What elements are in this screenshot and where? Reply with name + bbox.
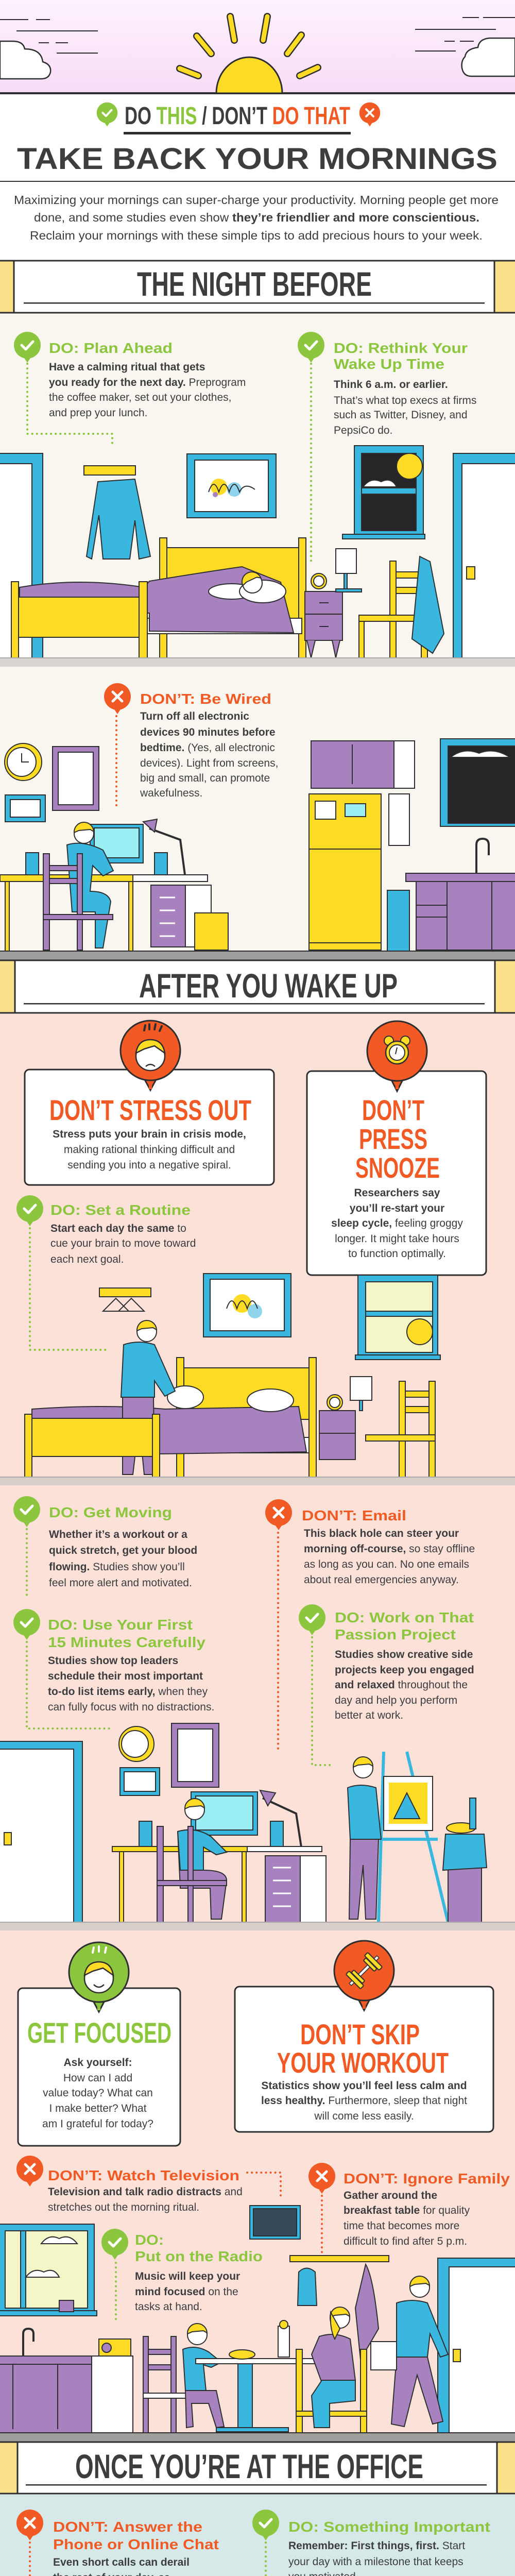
callout: don't stress out: DON’T STRESS OUT <box>49 1094 251 1126</box>
tip: set a routine: DO: Set a Routine <box>50 1202 191 1218</box>
tip: rethink wake up time: That’s what top execs at firms <box>334 395 476 406</box>
sky header background <box>0 0 515 94</box>
tip: email: DON’T: Email <box>302 1507 406 1523</box>
tip: be wired: big and small, can promote <box>140 772 270 784</box>
illustration: desk worker and painter <box>0 1723 487 1922</box>
tip: passion project: Passion Project <box>335 1626 456 1642</box>
icon: dumbbell <box>334 1941 394 2010</box>
tip: passion project: projects keep you engaged <box>335 1664 474 1676</box>
tip: rethink wake up time <box>298 332 476 562</box>
callout: don't stress out: sending you into a negative spiral. <box>67 1159 231 1171</box>
callout: don't press snooze: DON’T <box>362 1094 424 1126</box>
callout: don't press snooze: Researchers say <box>354 1187 440 1199</box>
callout: don't skip your workout: less healthy. Furthermore, sleep that night <box>261 2095 467 2107</box>
callout: don't press snooze: you’ll re-start your <box>350 1202 444 1214</box>
callout: don't skip your workout: Statistics show you’ll feel less calm and <box>261 2080 467 2092</box>
tip: passion project: DO: Work on That <box>335 1609 474 1625</box>
tip: first 15 minutes: to-do list items early, when they <box>48 1686 208 1698</box>
callout: get focused: GET FOCUSED <box>27 2016 171 2049</box>
tip: ignore family <box>308 2163 510 2260</box>
tip: ignore family: breakfast table for quality <box>344 2205 470 2216</box>
callout: don't press snooze: sleep cycle, feeling groggy <box>331 1217 463 1229</box>
tip: get moving: quick stretch, get your blood <box>49 1545 197 1556</box>
tip: something important: Remember: First things, first. Start <box>288 2540 465 2552</box>
callout: don't press snooze: SNOOZE <box>355 1151 440 1184</box>
tip: email <box>265 1499 475 1752</box>
tip: get moving: flowing. Studies show you’ll <box>49 1561 185 1573</box>
floor <box>0 1922 515 1930</box>
tip: put on the radio: mind focused on the <box>135 2286 238 2298</box>
illustration: night bedroom <box>0 446 515 658</box>
tip: email: about real emergencies anyway. <box>304 1574 459 1586</box>
tip: set a routine: each next goal. <box>50 1253 124 1265</box>
floor <box>0 1477 515 1485</box>
intro paragraph: done, and some studies even show they’re friendlier and more conscientious. <box>34 211 479 224</box>
tip: get moving: feel more alert and motivated. <box>49 1577 192 1589</box>
section header: once you're at the office <box>0 2442 515 2494</box>
icon: clouds <box>0 18 515 79</box>
callout: don't press snooze: to function optimally. <box>348 1248 446 1260</box>
kicker: do this / don't do that: DO THIS / DON’T DO THAT <box>125 103 350 130</box>
tip: watch television: Television and talk radio distracts and <box>48 2186 243 2198</box>
callout: don't skip your workout: DON’T SKIP <box>300 2018 420 2050</box>
tip: email: morning off-course, so stay offline <box>304 1543 475 1555</box>
callout: get focused: How can I add <box>63 2072 132 2084</box>
tip: plan ahead: and prep your lunch. <box>49 407 147 419</box>
tip: rethink wake up time: Wake Up Time <box>334 356 444 372</box>
callout: don't press snooze: longer. It might take hours <box>335 1233 459 1245</box>
callout: don't skip your workout: will come less easily. <box>314 2110 414 2122</box>
callout: don't skip your workout: YOUR WORKOUT <box>277 2046 449 2079</box>
icon: focused face <box>69 1942 129 2012</box>
tip: put on the radio <box>101 2229 263 2324</box>
panel: night before background <box>0 314 515 951</box>
tip: email: This black hole can steer your <box>304 1528 459 1539</box>
illustration: family breakfast kitchen <box>0 2206 515 2433</box>
icon: rising sun <box>180 16 318 93</box>
callout: get focused: value today? What can <box>43 2087 153 2099</box>
floor <box>0 951 515 960</box>
icon: alarm clock <box>367 1021 427 1091</box>
floor <box>0 658 515 667</box>
tip: be wired: bedtime. (Yes, all electronic <box>140 742 275 754</box>
tip: passion project <box>299 1604 474 1765</box>
section header: after you wake up: AFTER YOU WAKE UP <box>139 967 398 1005</box>
tip: rethink wake up time: such as Twitter, Disney, and <box>334 409 468 421</box>
tip: something important: DO: Something Important <box>288 2519 490 2535</box>
tip: ignore family: DON’T: Ignore Family <box>344 2171 510 2187</box>
tip: passion project: better at work. <box>335 1709 403 1721</box>
tip: answer the phone: Phone or Online Chat <box>53 2536 219 2552</box>
tip: put on the radio: tasks at hand. <box>135 2301 202 2313</box>
tip: plan ahead: the coffee maker, set out your clothes, <box>49 392 231 403</box>
title: TAKE BACK YOUR MORNINGS <box>17 142 497 176</box>
callout: get focused: Ask yourself: <box>63 2057 132 2069</box>
tip: passion project: Studies show creative side <box>335 1649 473 1660</box>
callout: don't stress out <box>25 1021 274 1185</box>
tip: be wired: DON’T: Be Wired <box>140 691 271 707</box>
tip: first 15 minutes: schedule their most important <box>48 1670 203 1682</box>
tip: passion project: day and help you perform <box>335 1694 457 1706</box>
tip: email: as long as you can. No one emails <box>304 1558 469 1570</box>
callout: get focused: am I grateful for today? <box>42 2118 153 2130</box>
callout: don't press snooze <box>307 1021 486 1275</box>
tip: plan ahead <box>14 332 246 446</box>
tip: be wired: devices 90 minutes before <box>140 726 276 738</box>
tip: passion project: and relaxed throughout the <box>335 1679 468 1691</box>
illustration: home office and kitchen <box>0 739 515 951</box>
tip: get moving <box>13 1496 197 1597</box>
tip: watch television <box>16 2156 281 2213</box>
intro paragraph: Reclaim your mornings with these simple tips to add precious hours to your week. <box>30 229 483 242</box>
floor <box>0 2433 515 2442</box>
tip: get moving: DO: Get Moving <box>49 1504 172 1520</box>
icon: stressed face <box>121 1021 180 1090</box>
illustration: making the bed in morning <box>25 1274 440 1477</box>
tip: something important <box>252 2510 490 2576</box>
callout: get focused: I make better? What <box>49 2103 147 2114</box>
tip: set a routine: cue your brain to move toward <box>50 1238 196 1249</box>
tip: first 15 minutes: Studies show top leaders <box>48 1655 178 1667</box>
tip: be wired: devices). Light from screens, <box>140 757 278 769</box>
tip: answer the phone: Even short calls can derail <box>53 2556 190 2568</box>
tip: rethink wake up time: DO: Rethink Your <box>334 340 468 356</box>
tip: be wired: Turn off all electronic <box>140 710 249 722</box>
tip: plan ahead: Have a calming ritual that gets <box>49 361 205 373</box>
section header: after you wake up <box>0 960 515 1013</box>
tip: watch television: stretches out the morning ritual. <box>48 2201 199 2213</box>
tip: be wired <box>104 683 278 807</box>
tip: set a routine: Start each day the same to <box>50 1223 186 1234</box>
section header: the night before: THE NIGHT BEFORE <box>137 265 372 303</box>
callout: don't skip your workout <box>235 1941 493 2132</box>
tip: first 15 minutes: can fully focus with no distractions. <box>48 1701 214 1713</box>
tip: watch television: DON’T: Watch Television <box>48 2167 239 2183</box>
tip: get moving: Whether it’s a workout or a <box>49 1529 187 1540</box>
tip: rethink wake up time: PepsiCo do. <box>334 425 392 436</box>
callout: don't stress out: Stress puts your brain in crisis mode, <box>53 1128 246 1140</box>
tip: put on the radio: Music will keep your <box>135 2270 240 2282</box>
tip: ignore family: Gather around the <box>344 2190 437 2201</box>
tip: set a routine <box>16 1195 196 1350</box>
tip: answer the phone: DON’T: Answer the <box>53 2519 202 2535</box>
tip: rethink wake up time: Think 6 a.m. or earlier. <box>334 379 448 391</box>
callout: don't stress out: making rational thinking difficult and <box>64 1144 235 1156</box>
callout: get focused <box>18 1942 180 2146</box>
tip: something important: your day with a milestone that keeps <box>288 2556 464 2568</box>
tip: plan ahead: DO: Plan Ahead <box>49 340 173 356</box>
tip: first 15 minutes <box>13 1609 214 1728</box>
tip: first 15 minutes: DO: Use Your First <box>48 1617 193 1633</box>
tip: put on the radio: DO: <box>135 2232 164 2248</box>
panel: after you wake up background <box>0 1014 515 2433</box>
panel: office background <box>0 2495 515 2576</box>
intro paragraph <box>14 193 499 242</box>
section header: the night before <box>0 261 515 313</box>
tip: be wired: wakefulness. <box>140 787 202 799</box>
tip: first 15 minutes: 15 Minutes Carefully <box>48 1634 205 1650</box>
tip: ignore family: difficult to find after 5 p.m. <box>344 2235 467 2247</box>
callout: don't press snooze: PRESS <box>359 1123 427 1155</box>
tip: ignore family: time that becomes more <box>344 2220 459 2232</box>
tip: put on the radio: Put on the Radio <box>135 2248 263 2264</box>
tip: plan ahead: you ready for the next day. Preprogram <box>49 377 246 388</box>
intro paragraph: Maximizing your mornings can super-charge your productivity. Morning people get more <box>14 193 499 207</box>
tip: answer the phone <box>16 2510 219 2576</box>
